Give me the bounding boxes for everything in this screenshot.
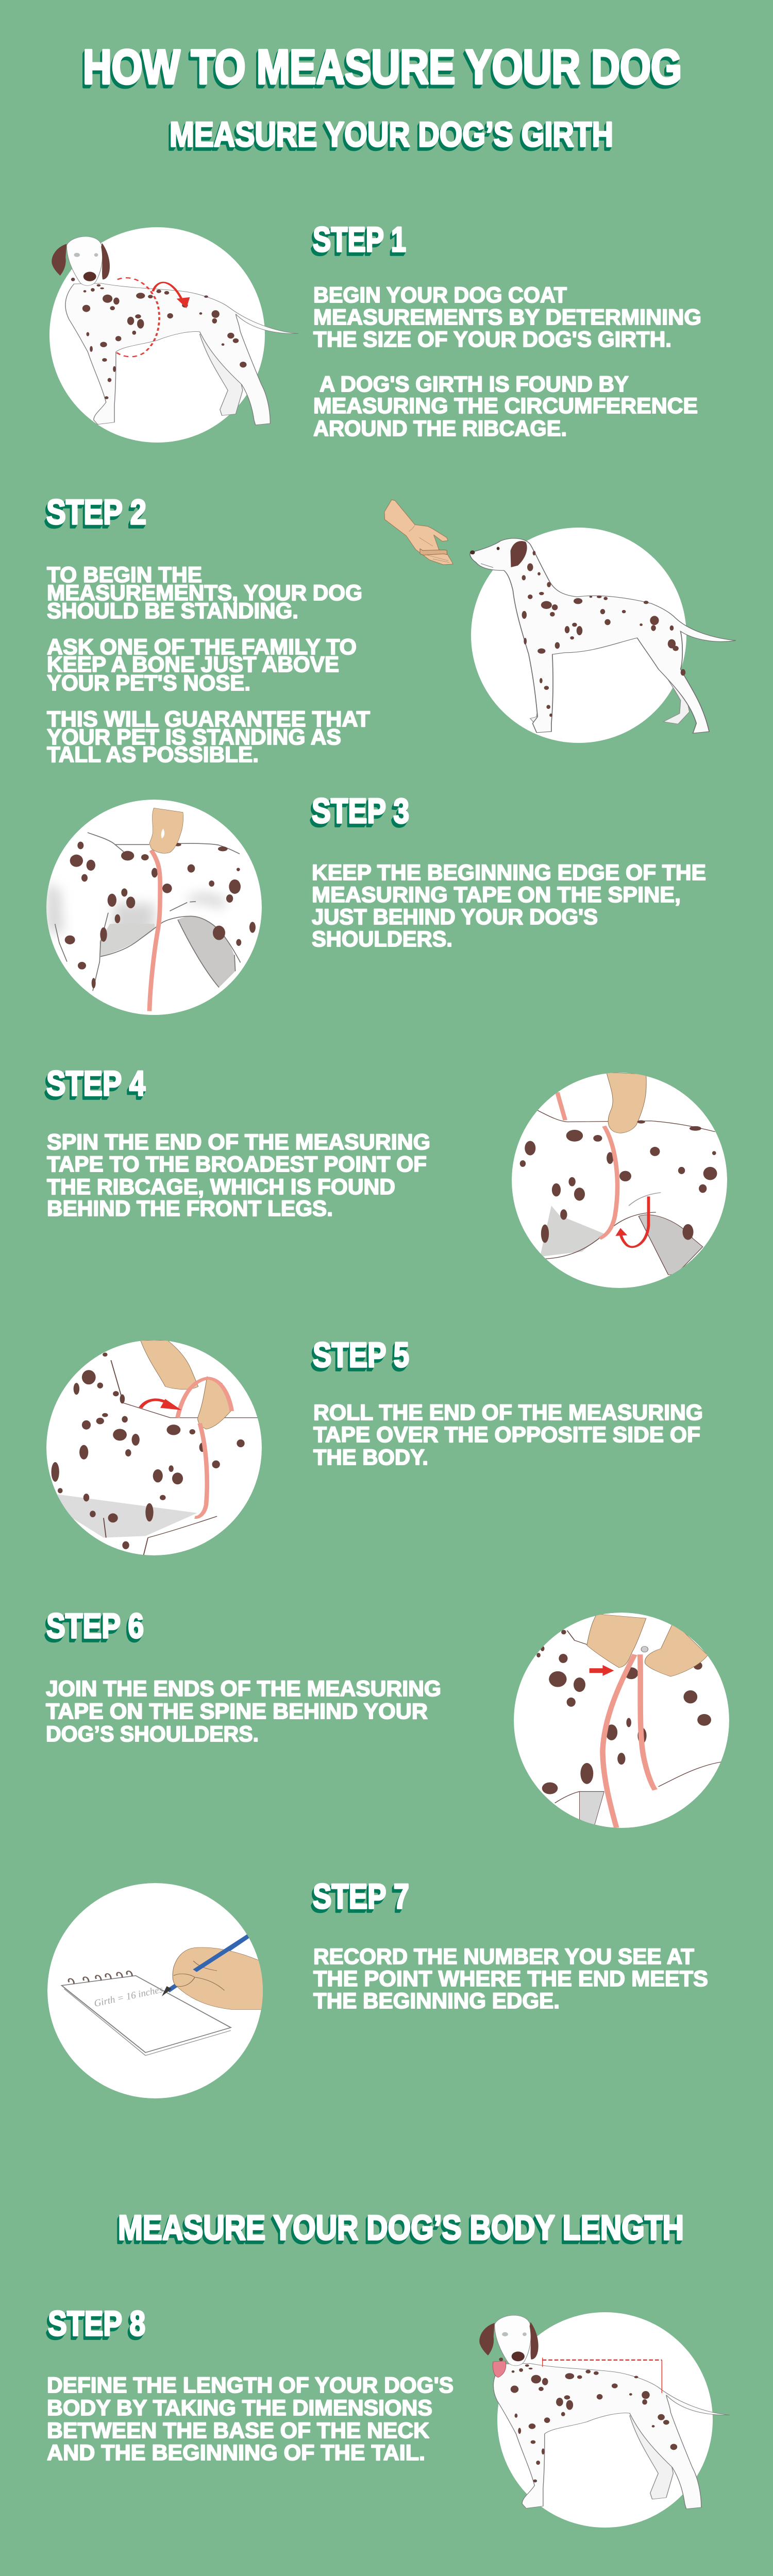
step 2 text: ASK ONE OF THE FAMILY TO [47, 635, 357, 659]
step 1 text: THE SIZE OF YOUR DOG'S GIRTH. [313, 327, 671, 352]
panel: step 3 [46, 791, 706, 1020]
step 3 text: JUST BEHIND YOUR DOG'S [312, 905, 598, 929]
step 1 text: AROUND THE RIBCAGE. [313, 416, 567, 441]
step 5 text [313, 1400, 703, 1470]
panel: step 1 [49, 220, 701, 443]
step 8 text: DEFINE THE LENGTH OF YOUR DOG'S [47, 2373, 453, 2398]
step 8 text: BODY BY TAKING THE DIMENSIONS [47, 2396, 432, 2420]
step 2 text: TO BEGIN THE [47, 563, 202, 587]
step 1 text: A DOG'S GIRTH IS FOUND BY [320, 372, 629, 397]
illustration: tape rolled over the body [46, 1340, 262, 1557]
step 4 text [47, 1130, 430, 1221]
step 5 text: THE BODY. [313, 1445, 428, 1470]
step 3 text [312, 860, 706, 952]
illustration: tape around ribcage [512, 1073, 727, 1288]
illustration: tape on the spine [46, 800, 262, 1020]
step 2 text: YOUR PET IS STANDING AS [47, 725, 341, 750]
step 8 text: BETWEEN THE BASE OF THE NECK [47, 2418, 429, 2443]
step 7 text: THE BEGINNING EDGE. [313, 1989, 560, 2013]
illustration: dalmatian with girth marker [49, 227, 298, 443]
illustration: tape ends joined at the spine [514, 1613, 729, 1828]
section heading: body length: MEASURE YOUR DOG’S BODY LENGTH [118, 2208, 684, 2247]
step 3 heading: STEP 3 [312, 791, 409, 831]
panel: step 8 [47, 2304, 730, 2528]
step 4 heading: STEP 4 [46, 1064, 145, 1103]
illustration: dalmatian standing with treat [384, 500, 736, 743]
step 3 text: MEASURING TAPE ON THE SPINE, [312, 883, 681, 907]
panel: step 7 [47, 1877, 708, 2098]
step 7 heading: STEP 7 [313, 1877, 409, 1916]
step 2 text: TALL AS POSSIBLE. [47, 742, 259, 767]
step 2 text: THIS WILL GUARANTEE THAT [47, 707, 370, 732]
step 2 text: KEEP A BONE JUST ABOVE [47, 652, 339, 677]
step 5 text: ROLL THE END OF THE MEASURING [313, 1400, 703, 1425]
step 8 heading: STEP 8 [48, 2304, 145, 2343]
step 6 text: DOG’S SHOULDERS. [46, 1722, 259, 1747]
step 1 text: MEASUREMENTS BY DETERMINING [313, 305, 701, 330]
step 2 text: SHOULD BE STANDING. [47, 599, 298, 623]
step 4 text: THE RIBCAGE, WHICH IS FOUND [47, 1175, 395, 1199]
step 6 text [46, 1676, 441, 1747]
step 8 text [47, 2373, 453, 2465]
step 1 text: BEGIN YOUR DOG COAT [313, 283, 567, 308]
step 2 text: MEASUREMENTS, YOUR DOG [47, 581, 362, 605]
panel: step 5 [46, 1335, 703, 1557]
step 5 text: TAPE OVER THE OPPOSITE SIDE OF [313, 1422, 700, 1447]
illustration: dalmatian with body length marker [479, 2312, 730, 2528]
step 7 text [313, 1944, 708, 2013]
step 2 text [47, 563, 370, 767]
step 8 text: AND THE BEGINNING OF THE TAIL. [47, 2441, 425, 2465]
step 3 text: SHOULDERS. [312, 927, 452, 952]
step 7 text: RECORD THE NUMBER YOU SEE AT [313, 1944, 694, 1969]
panel: step 6 [46, 1606, 729, 1828]
step 1 text: MEASURING THE CIRCUMFERENCE [313, 394, 698, 418]
step 6 text: TAPE ON THE SPINE BEHIND YOUR [46, 1699, 428, 1724]
step 3 text: KEEP THE BEGINNING EDGE OF THE [312, 860, 706, 885]
panel: step 4 [46, 1064, 727, 1288]
handwritten note: Girth = 16 inches [93, 1984, 164, 2009]
step 4 text: SPIN THE END OF THE MEASURING [47, 1130, 430, 1155]
step 4 text: TAPE TO THE BROADEST POINT OF [47, 1152, 427, 1177]
illustration: hand writing on a notepad [47, 1883, 266, 2098]
step 5 heading: STEP 5 [313, 1335, 409, 1375]
panel: step 2 [46, 493, 736, 767]
step 4 text: BEHIND THE FRONT LEGS. [47, 1196, 333, 1221]
step 7 text: THE POINT WHERE THE END MEETS [313, 1967, 708, 1991]
step 2 text: YOUR PET'S NOSE. [47, 671, 250, 696]
step 2 heading: STEP 2 [46, 493, 146, 532]
step 6 text: JOIN THE ENDS OF THE MEASURING [46, 1676, 441, 1701]
section heading: girth: MEASURE YOUR DOG’S GIRTH [170, 115, 613, 154]
step 6 heading: STEP 6 [46, 1606, 144, 1646]
step 1 text [313, 283, 701, 441]
step 1 heading: STEP 1 [313, 220, 406, 259]
